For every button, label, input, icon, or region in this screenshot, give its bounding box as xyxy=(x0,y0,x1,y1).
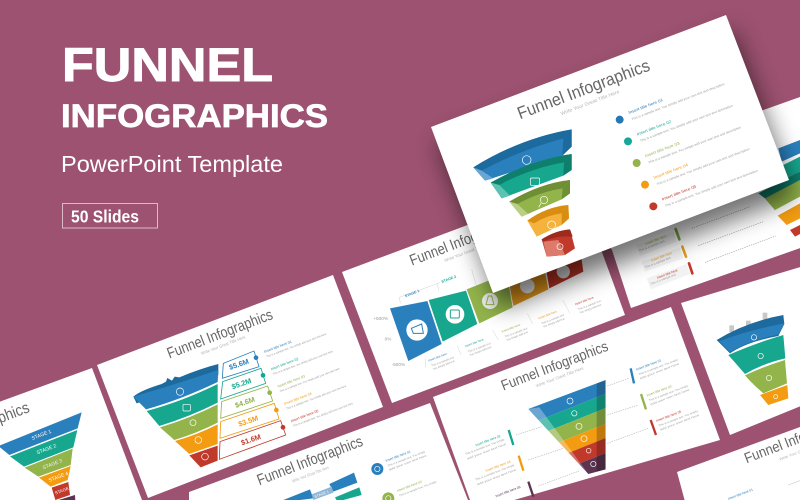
slide: funnel with dollar values: $5.2M xyxy=(230,376,253,391)
slide: funnel with dollar values: $4.6M xyxy=(234,395,256,410)
funnel layer 5 xyxy=(542,229,575,257)
slide: stage columns chart: Insert title here xyxy=(574,295,594,306)
slide: pyramid funnel: add your own text here xyxy=(476,467,517,486)
slide: stage columns chart: -500% xyxy=(392,362,405,367)
slide: top right timeline behind main slide: Insert title here xyxy=(656,268,678,280)
slide: pyramid funnel: Write Your Great Title Here xyxy=(535,365,585,388)
slide: left funnel with stages: STAGE 2 xyxy=(36,443,58,456)
slide: top right timeline behind main slide: Insert title here xyxy=(645,234,667,246)
slide: stage columns chart: STAGE 2 xyxy=(441,275,457,284)
slide: bottom centre ribbon funnel: Insert title here 02 xyxy=(396,480,423,493)
slide: bottom centre ribbon funnel: This is a sample text. You simply xyxy=(387,449,426,468)
slide: bottom centre ribbon funnel: This is a sample text. You simply xyxy=(398,479,438,498)
slide: left funnel with stages: STAGE 3 xyxy=(42,458,64,471)
heading: FUNNEL: FUNNEL xyxy=(62,38,273,91)
slide: stage columns chart: +500% xyxy=(373,316,388,321)
list item 05: This is a sample text. You simply add your own text and description xyxy=(664,169,759,208)
list item 02: Insert title here 02 xyxy=(636,118,673,137)
funnel layer 2 xyxy=(491,154,572,198)
slide: pyramid funnel: Insert title here 04 xyxy=(485,460,511,473)
heading: INFOGRAPHICS: INFOGRAPHICS xyxy=(61,98,328,134)
slide: left funnel with stages xyxy=(0,368,142,500)
slide: top right timeline behind main slide: This is a sample text xyxy=(644,256,671,269)
list item 01: This is a sample text. You simply add your own text and description xyxy=(631,82,725,121)
slide: funnel with dollar values: Insert title here 04 xyxy=(284,392,312,406)
slide: stage columns chart: This is a sample text xyxy=(467,341,492,354)
slide: stage columns chart: STAGE 1 xyxy=(404,289,420,298)
slide: stage columns chart: You simply add text xyxy=(542,317,565,329)
slide: pyramid funnel: This is a sample text. You simply xyxy=(658,409,699,428)
slide: stage columns chart: Insert title here xyxy=(464,337,484,348)
slide: stage columns chart: Insert title here xyxy=(538,309,558,320)
slide: bottom centre ribbon funnel: Write Your Great Title Here xyxy=(291,465,330,484)
slide: funnel with dollar values: Insert title here 02 xyxy=(270,357,299,371)
list item 04: This is a sample text. You simply add your own text and description xyxy=(656,147,750,186)
slide: pyramid funnel xyxy=(433,307,720,500)
slide: funnel with dollar values: This is a sample text. You simply add your own text here xyxy=(266,332,327,359)
slide: pyramid funnel: add your own text here xyxy=(466,442,507,461)
slide: stage columns chart: This is a sample text xyxy=(541,313,565,325)
slide: funnel with dollar values: Insert title here 01 xyxy=(264,340,292,354)
slide: stage columns chart: Insert title here xyxy=(428,352,448,363)
slide: bottom right list xyxy=(677,412,800,500)
slide: pyramid funnel: Insert title here 06 xyxy=(495,485,521,498)
list item 01: Insert title here 01 xyxy=(628,97,664,115)
slide: pyramid funnel: Insert title here 05 xyxy=(656,410,682,423)
slide: bottom centre ribbon funnel: add your own text here xyxy=(388,453,428,472)
slide: funnel with dollar values: $1.6M xyxy=(240,432,262,447)
slide: stage columns chart: You simply add text xyxy=(579,303,602,315)
slide: stage columns chart: Insert title here xyxy=(501,323,521,334)
subheading: PowerPoint Template: PowerPoint Template xyxy=(61,151,283,177)
list item 04: Insert title here 04 xyxy=(653,162,689,180)
slide title: Funnel Infographics xyxy=(514,55,653,123)
slide: top right timeline behind main slide: Insert title here xyxy=(651,251,673,263)
slide: funnel with dollar values: Write Your Great Title Here xyxy=(200,334,247,356)
slide: funnel with dollar values: This is a sample text. You simply add your own text here xyxy=(272,349,334,376)
slide: top right timeline behind main slide: This is a sample text xyxy=(638,239,665,253)
badge: 50 Slides: 50 Slides xyxy=(71,206,139,226)
slide: stage columns chart: Funnel Infographics xyxy=(407,213,519,269)
slide: pyramid funnel: This is a sample text. You simply xyxy=(648,383,689,402)
slide: bottom centre ribbon funnel xyxy=(189,403,470,500)
slide: pyramid funnel: add your own text here xyxy=(659,413,700,432)
slide: pyramid funnel: add your own text here xyxy=(639,361,680,380)
slide: funnel with dollar values: This is a sample text. You simply add your own text here xyxy=(279,366,340,393)
slide: stage columns chart: 0% xyxy=(385,337,391,342)
slide: top right timeline behind main slide: This is a sample text xyxy=(650,272,677,286)
slide: pyramid funnel: Insert title here 01 xyxy=(636,358,662,372)
list item 02: This is a sample text. You simply add your own text and description xyxy=(639,104,734,143)
slide: stage columns chart: This is a sample text xyxy=(504,326,528,339)
slide: right funnel with pegs xyxy=(681,255,800,435)
slide: funnel with dollar values: $5.6M xyxy=(228,357,250,372)
slide: funnel with dollar values xyxy=(97,275,383,498)
slide: bottom centre ribbon funnel: Funnel Infographics xyxy=(255,433,366,489)
badge: 50 Slides xyxy=(62,204,158,228)
slide: pyramid funnel: Insert title here 03 xyxy=(646,384,672,398)
slide: stage columns chart: You simply add text xyxy=(506,330,529,342)
slide: pyramid funnel: This is a sample text. You simply xyxy=(638,357,679,376)
slide subtitle: Write Your Great Title Here xyxy=(560,89,621,117)
slide: top right timeline behind main slide xyxy=(565,90,800,308)
slide: left funnel with stages: STAGE 5 xyxy=(54,484,73,496)
slide: funnel with dollar values: This is a sample text. You simply add your own text here xyxy=(286,384,347,411)
slide: left funnel with stages: STAGE 1 xyxy=(31,429,53,442)
list item 03: Insert title here 03 xyxy=(644,140,681,158)
slide: stage columns chart: You simply add text xyxy=(469,345,492,357)
slide: left funnel with stages: STAGE 4 xyxy=(48,471,70,484)
slide: stage columns chart xyxy=(342,184,625,403)
slide: stage columns chart: This is a sample text xyxy=(431,355,455,368)
slide: stage columns chart: This is a sample text xyxy=(577,299,602,311)
slide: main 3D funnel xyxy=(431,15,789,293)
slide: bottom centre ribbon funnel: Insert title here 01 xyxy=(385,450,411,463)
slide: stage columns chart: You simply add text xyxy=(432,359,455,371)
list item 05: Insert title here 05 xyxy=(661,183,698,202)
funnel layer 4 xyxy=(527,205,569,237)
slide: funnel with dollar values: Funnel Infographics xyxy=(165,306,276,362)
slide: pyramid funnel: This is a sample text. You simply xyxy=(465,437,506,456)
list item 03: This is a sample text. You simply add your own text and description xyxy=(648,125,742,165)
slide: pyramid funnel: add your own text here xyxy=(650,387,691,406)
slide: bottom centre ribbon funnel: STAGE 1 xyxy=(314,490,330,499)
slide: funnel with dollar values: $3.5M xyxy=(237,413,259,429)
slide: funnel with dollar values: Insert title here 03 xyxy=(277,374,306,389)
slide: pyramid funnel: This is a sample text. You simply xyxy=(475,463,516,482)
slide: funnel with dollar values: This is a sample text. You simply add your own text here xyxy=(292,401,354,428)
slide: stage columns chart: Write Your Great Title Here xyxy=(444,240,494,263)
slide: pyramid funnel: Funnel Infographics xyxy=(499,339,611,394)
funnel layer 1 xyxy=(473,129,572,181)
funnel layer 3 xyxy=(509,180,570,217)
slide: funnel with dollar values: Insert title here 05 xyxy=(290,409,319,423)
slide: pyramid funnel: Insert title here 02 xyxy=(475,434,501,447)
